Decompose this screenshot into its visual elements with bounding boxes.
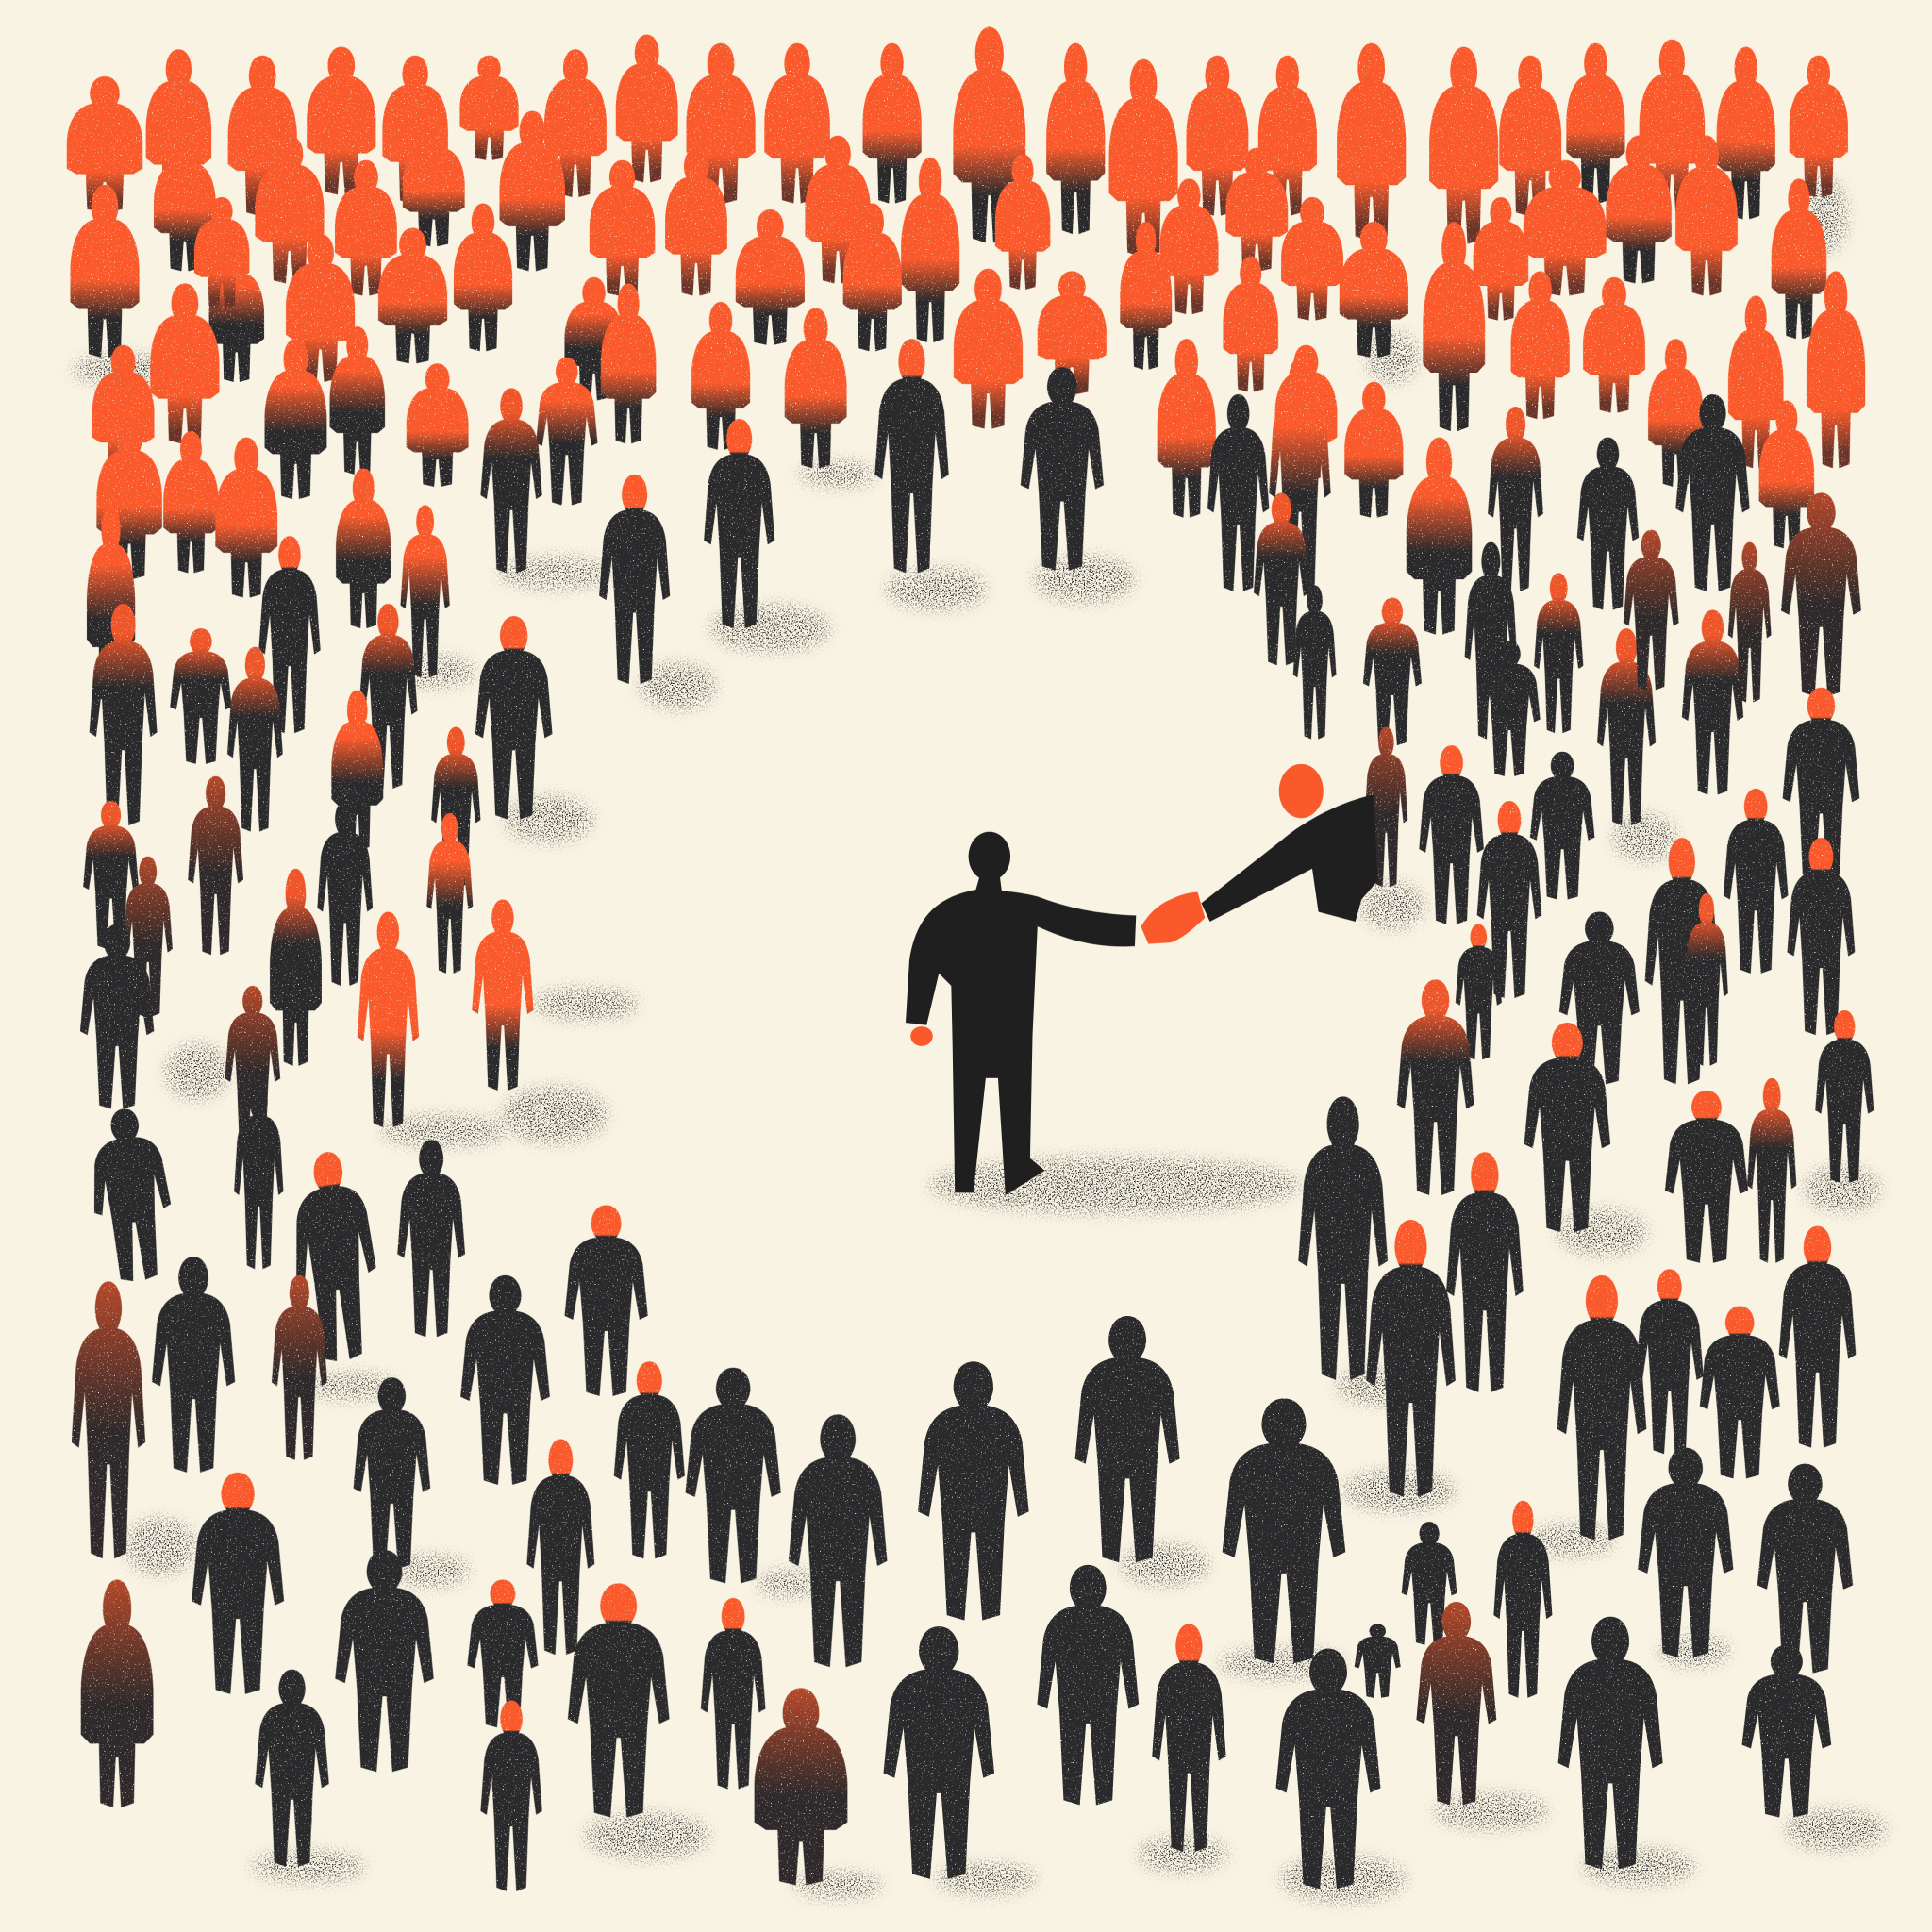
crowd: dark bottom left group [72, 1140, 765, 1891]
second figure reaching from the crowd [1201, 764, 1377, 922]
central figure reaching out [906, 832, 1136, 1195]
crowd: dark bottom centre group [686, 1316, 1226, 1885]
crowd: right transition group [874, 339, 1874, 1263]
clasped orange hands [1141, 892, 1205, 943]
crowd: dark bottom right group [1223, 1096, 1856, 1889]
crowd: orange back rows [67, 27, 1865, 548]
crowd: left transition group [80, 326, 774, 1285]
